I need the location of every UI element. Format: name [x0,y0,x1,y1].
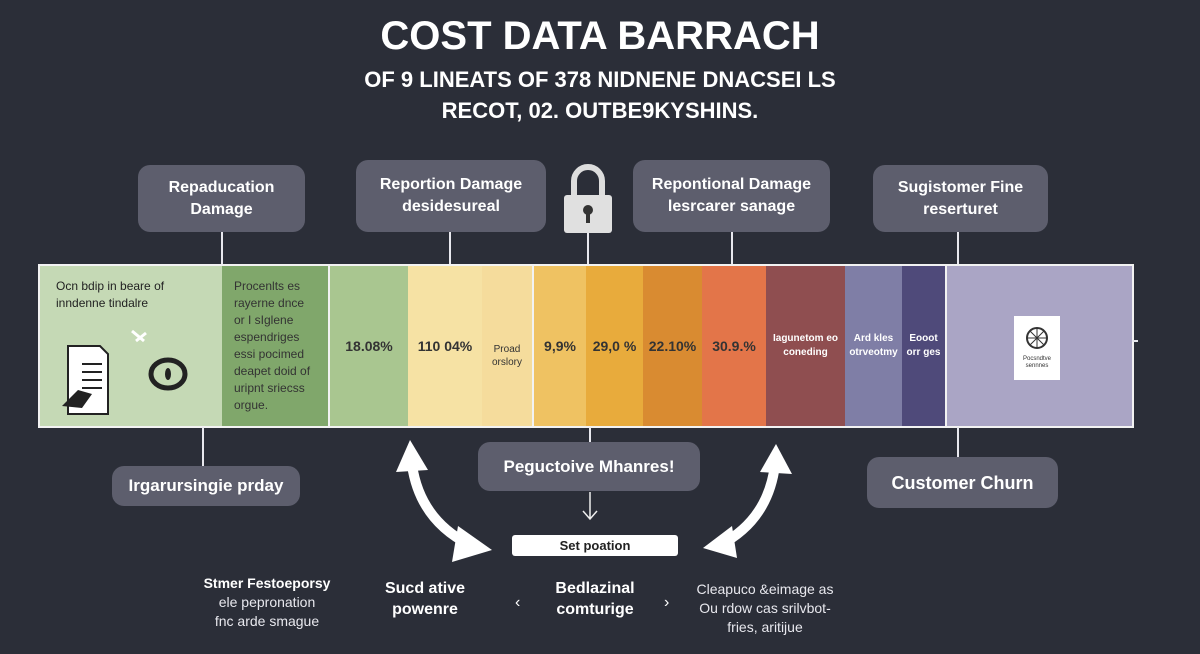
segment 1: inndenne tindalre [56,296,148,310]
segment 2: essi pocimed [234,347,304,361]
box: Peguctoive Mhanres: Peguctoive Mhanres! [504,456,674,476]
segment 5 [482,266,534,426]
label: Set poation [512,535,678,556]
segment 9 [702,266,768,426]
subtitle [364,67,836,123]
box: Reportion Damage [356,160,546,232]
box: Sugistomer Fine [873,165,1048,232]
box: Customer Churn: Customer Churn [891,472,1034,492]
segment 9: 30.9.% [712,338,756,354]
segment 10: Iagunetom eo [773,333,838,344]
segment 8 [643,266,704,426]
box: Repontional Damage [633,160,830,232]
bottom text col 3: Bedlazinal [555,580,635,597]
label: Set poation: Set poation [560,538,630,553]
segment 5: Proad [494,344,520,355]
box: Irgarursingie prday: Irgarursingie prday [129,476,283,495]
bottom text col 4: fries, aritijue [727,619,803,635]
segment 6 [534,266,588,426]
bottom text col 4: Ou rdow cas srilvbot- [699,600,831,616]
bottom text col 3 [555,580,635,618]
bottom text col 1: Stmer Festoeporsy [204,575,330,591]
box: Reportion Damage: desidesureal [402,198,500,215]
box: Peguctoive Mhanres [478,442,700,491]
segment 2: uripnt sriecss [234,381,305,395]
bottom text col 2 [385,580,465,618]
box: Repaducation Damage [138,165,305,232]
segment 1: Ocn bdip in beare of [56,279,164,293]
segment 13 with icon card: Pocsndtve [1023,356,1051,362]
box: Repaducation Damage: Repaducation [169,178,274,196]
segment 5: orslory [492,357,522,368]
bottom text col 4 [696,581,833,635]
icon: padlock [564,164,612,233]
segment 8: 22.10% [649,338,696,354]
segment 12: Eooot [909,333,938,344]
box: Reportion Damage: Reportion Damage [380,176,522,193]
segment 7 [586,266,645,426]
subtitle: RECOT, 02. OUTBE9KYSHINS. [442,98,758,123]
segment 2: Procenlts es [234,279,300,293]
segment 10 [766,266,847,426]
segment 2: deapet doid of [234,364,310,378]
box: Repontional Damage: lesrcarer sanage [668,198,795,215]
cost bar chart [38,264,1134,428]
box: Sugistomer Fine: Sugistomer Fine [898,178,1023,196]
segment 10: coneding [783,347,828,358]
segment 2: or I sIglene [234,313,293,327]
segment 12: orr ges [907,347,940,358]
chevron right: › [664,594,669,611]
chevron left: ‹ [515,594,520,611]
box: Sugistomer Fine: reserturet [923,200,998,218]
bottom text col 4: Cleapuco &eimage as [696,581,833,597]
segment 2: orgue. [234,398,268,412]
box: Customer Churn [867,457,1058,508]
segment 2: espendriges [234,330,299,344]
box: Irgarursingie prday [112,466,300,506]
bottom text col 3: comturige [556,601,634,618]
box: Repontional Damage: Repontional Damage [652,176,811,193]
subtitle: OF 9 LINEATS OF 378 NIDNENE DNACSEI LS [364,67,836,92]
bottom text col 1: ele pepronation [219,594,315,610]
segment 3 [330,266,410,426]
segment 11: otrveotmy [849,347,898,358]
segment 13 with icon card: sennnes [1026,363,1048,369]
bottom text col 1 [204,575,330,629]
bottom text col 1: fnc arde smague [215,613,319,629]
box: Repaducation Damage: Damage [190,200,253,218]
segment 2 [222,266,330,426]
bottom text col 2: powenre [392,601,458,618]
segment 13 with icon card [1014,316,1060,380]
segment 4 [408,266,484,426]
title: COST DATA BARRACH [380,14,820,58]
bottom text col 2: Sucd ative [385,580,465,597]
segment 6: 9,9% [544,338,576,354]
segment 2: rayerne dnce [234,296,304,310]
segment 3: 18.08% [345,338,393,354]
segment 1 [40,266,224,426]
segment 11 [845,266,904,426]
segment 12 [902,266,947,426]
segment 11: Ard kles [854,333,893,344]
segment 7: 29,0 % [593,338,636,354]
segment 4: 110 04% [418,338,472,354]
